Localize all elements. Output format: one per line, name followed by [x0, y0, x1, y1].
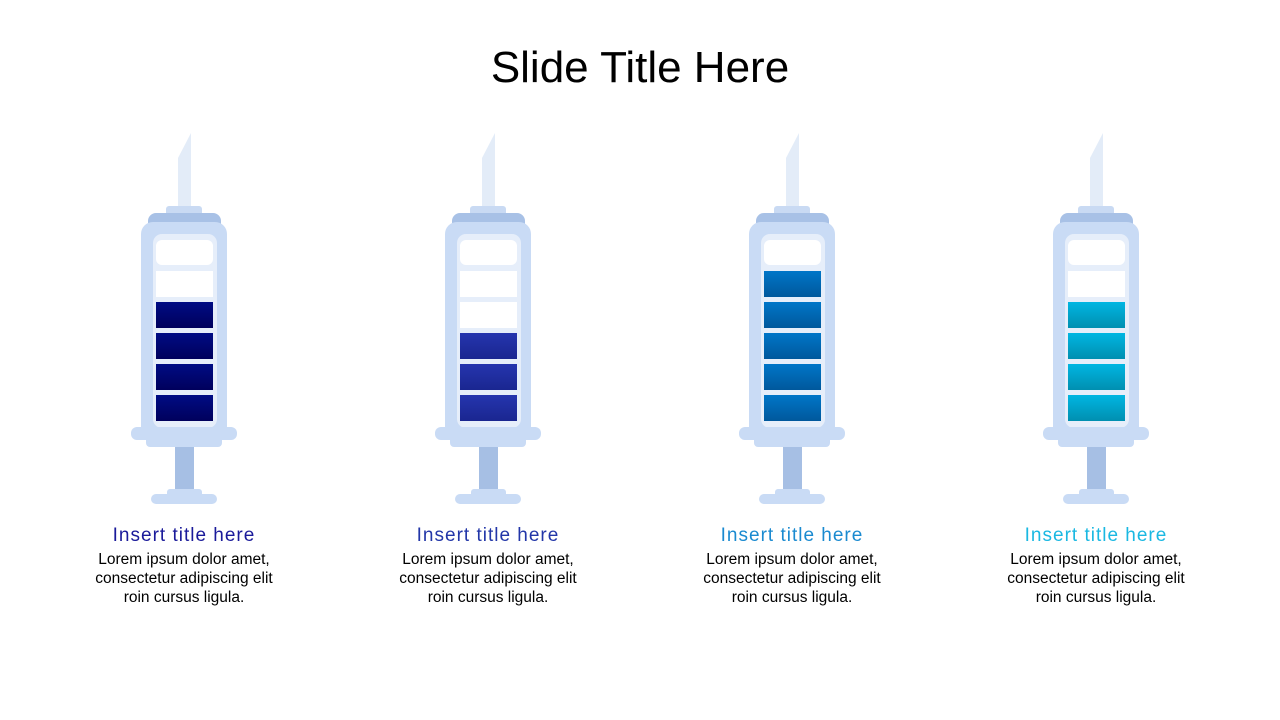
caption 1: Lorem ipsum dolor amet,: [98, 551, 270, 568]
caption 3: Insert title here: [721, 525, 863, 546]
caption 4: Lorem ipsum dolor amet,: [1010, 551, 1182, 568]
caption 4: [1007, 525, 1185, 606]
caption 4: Insert title here: [1025, 525, 1167, 546]
caption 3: roin cursus ligula.: [732, 589, 852, 606]
caption 1: consectetur adipiscing elit: [95, 570, 273, 587]
caption 2: [399, 525, 577, 606]
title: Slide Title Here: [491, 43, 789, 92]
caption 4: roin cursus ligula.: [1036, 589, 1156, 606]
syringe 3: [739, 133, 845, 504]
caption 1: [95, 525, 273, 606]
caption 2: Lorem ipsum dolor amet,: [402, 551, 574, 568]
caption 1: Insert title here: [113, 525, 255, 546]
caption 3: Lorem ipsum dolor amet,: [706, 551, 878, 568]
caption 2: consectetur adipiscing elit: [399, 570, 577, 587]
syringe 4: [1043, 133, 1149, 504]
caption 3: consectetur adipiscing elit: [703, 570, 881, 587]
caption 4: consectetur adipiscing elit: [1007, 570, 1185, 587]
caption 2: Insert title here: [417, 525, 559, 546]
caption 1: roin cursus ligula.: [124, 589, 244, 606]
syringe 1: [131, 133, 237, 504]
caption 2: roin cursus ligula.: [428, 589, 548, 606]
caption 3: [703, 525, 881, 606]
syringe 2: [435, 133, 541, 504]
